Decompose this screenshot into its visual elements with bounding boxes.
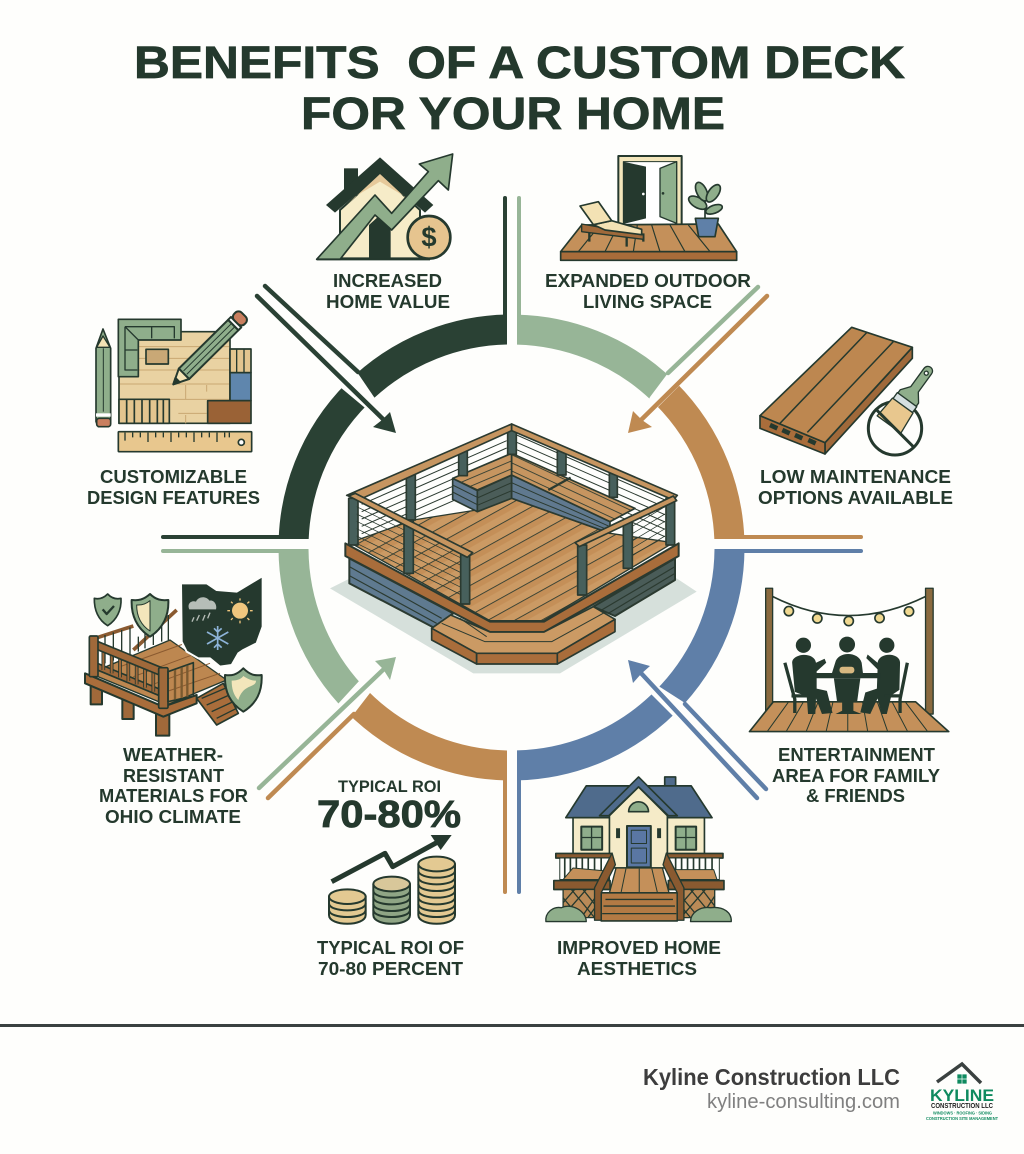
deck beam	[85, 673, 197, 717]
shield large	[132, 594, 168, 637]
callout: typical ROI 70-80%	[317, 778, 461, 836]
logo: Kyline Construction: KYLINE	[930, 1086, 994, 1105]
label: expanded outdoor living space: EXPANDED OUTDOOR	[545, 271, 751, 291]
label: weather-resistant materials: WEATHER-	[123, 745, 223, 765]
logo: Kyline Construction	[926, 1064, 998, 1121]
icon: increased home value	[317, 154, 453, 259]
footer: company name and website: kyline-consulting.com	[707, 1090, 900, 1113]
ruler	[118, 432, 252, 452]
title: BENEFITS OF A CUSTOM DECK	[134, 37, 906, 88]
ring segment: brown right	[658, 386, 744, 539]
pergola posts	[766, 588, 773, 714]
arrow: dark into centre	[257, 286, 396, 433]
stairs	[595, 853, 684, 921]
callout: typical ROI 70-80%: TYPICAL ROI	[338, 778, 441, 796]
lounge chair	[589, 230, 643, 247]
label: expanded outdoor living space: LIVING SPACE	[583, 292, 712, 312]
logo: Kyline Construction: CONSTRUCTION LLC	[931, 1101, 993, 1110]
title: FOR YOUR HOME	[301, 88, 725, 139]
deck front rail	[93, 662, 163, 697]
snowflake	[207, 626, 228, 650]
ring segment: dark upper	[358, 314, 507, 398]
callout: typical ROI 70-80%: 70-80%	[317, 794, 461, 836]
label: weather-resistant materials: OHIO CLIMATE	[105, 807, 241, 827]
ring segment: blue right	[660, 549, 744, 702]
right porch	[667, 853, 724, 918]
sun	[232, 603, 248, 619]
label: typical ROI percent: TYPICAL ROI OF	[317, 938, 464, 958]
ring segment: green left	[278, 549, 359, 704]
label: increased home value: HOME VALUE	[326, 292, 450, 312]
front rails	[349, 493, 677, 557]
connector lines	[163, 198, 861, 892]
label: improved home aesthetics: AESTHETICS	[577, 959, 697, 979]
footer: company name and website	[643, 1064, 900, 1113]
shield lower	[225, 668, 262, 712]
floor boards	[350, 498, 673, 621]
label: low maintenance options: OPTIONS AVAILABLE	[758, 488, 953, 508]
front posts	[404, 520, 632, 604]
arrow: brown into centre	[628, 287, 767, 433]
deck floor	[90, 640, 227, 705]
deck side rail	[168, 663, 193, 702]
plant	[702, 198, 707, 218]
label: customizable design features	[87, 467, 260, 508]
back top rails	[347, 424, 677, 500]
label: entertainment area: ENTERTAINMENT	[778, 745, 935, 765]
label: increased home value: INCREASED	[333, 271, 442, 291]
icon: low maintenance board and crossed brush	[760, 327, 942, 455]
arrow: blue into centre	[628, 660, 766, 798]
back cables	[362, 435, 665, 541]
arrow: green into centre	[259, 657, 396, 798]
coin stack medium	[373, 877, 410, 924]
porch floor	[609, 868, 669, 893]
icon: customizable design	[96, 309, 252, 452]
ring segment: dark lower	[278, 388, 364, 539]
deck boards	[749, 702, 949, 732]
Ohio map	[181, 576, 263, 667]
cloud	[189, 597, 216, 609]
back posts	[349, 428, 675, 545]
ring segment: green top right	[517, 314, 667, 398]
icon: expanded outdoor living space	[561, 156, 737, 260]
label: typical ROI percent: 70-80 PERCENT	[318, 959, 463, 979]
label: low maintenance options: LOW MAINTENANCE	[760, 467, 951, 487]
ring: segmented circular diagram	[294, 330, 730, 766]
icon: entertainment area	[749, 588, 949, 732]
title	[134, 37, 906, 139]
coin stack small	[329, 889, 366, 924]
label: customizable design features: DESIGN FEATURES	[87, 488, 260, 508]
coin stack large	[418, 857, 455, 924]
icon: weather resistant deck with Ohio map	[85, 576, 263, 736]
stairs	[197, 683, 238, 725]
label: weather-resistant materials	[99, 745, 248, 827]
icon: improved home aesthetics	[546, 777, 731, 922]
skirt left	[349, 558, 453, 627]
label: expanded outdoor living space	[545, 271, 751, 312]
label: entertainment area	[772, 745, 940, 806]
label: weather-resistant materials: MATERIALS FOR	[99, 786, 248, 806]
people and table	[785, 637, 907, 714]
icon: increased home value: $	[421, 222, 437, 253]
central deck illustration	[330, 424, 697, 673]
footer divider	[0, 1024, 1024, 1027]
label: low maintenance options	[758, 467, 953, 508]
deck shadow	[330, 578, 697, 673]
skirt right	[593, 558, 675, 616]
string lights	[773, 597, 926, 616]
label: entertainment area: AREA FOR FAMILY	[772, 766, 940, 786]
footer: company name and website: Kyline Construction LLC	[643, 1064, 900, 1090]
logo: Kyline Construction: CONSTRUCTION SITE MANAGEMENT	[926, 1116, 998, 1121]
shield small	[94, 594, 121, 626]
front right cables	[632, 507, 665, 556]
left porch	[554, 853, 611, 918]
ring segment: brown bottom	[353, 693, 507, 780]
logo: Kyline Construction: WINDOWS · ROOFING · SIDING	[933, 1110, 992, 1116]
large pencil	[168, 309, 249, 390]
ring segment: blue bottom	[517, 694, 673, 780]
deck posts	[91, 682, 169, 736]
icon: growth arrow and coins	[329, 835, 455, 924]
label: typical ROI percent	[317, 938, 464, 979]
bushes	[546, 906, 586, 922]
label: increased home value	[326, 271, 450, 312]
brush	[877, 359, 942, 433]
front left cables	[357, 507, 462, 595]
steps	[432, 607, 615, 664]
small pencil	[96, 329, 111, 427]
label: entertainment area: & FRIENDS	[806, 786, 905, 806]
label: improved home aesthetics: IMPROVED HOME	[557, 938, 721, 958]
bench left	[453, 453, 512, 512]
rim fascia	[345, 543, 679, 632]
deck back rail	[95, 610, 177, 650]
label: customizable design features: CUSTOMIZABLE	[100, 467, 247, 487]
label: improved home aesthetics	[557, 938, 721, 979]
bench right	[512, 453, 635, 533]
label: weather-resistant materials: RESISTANT	[123, 766, 224, 786]
